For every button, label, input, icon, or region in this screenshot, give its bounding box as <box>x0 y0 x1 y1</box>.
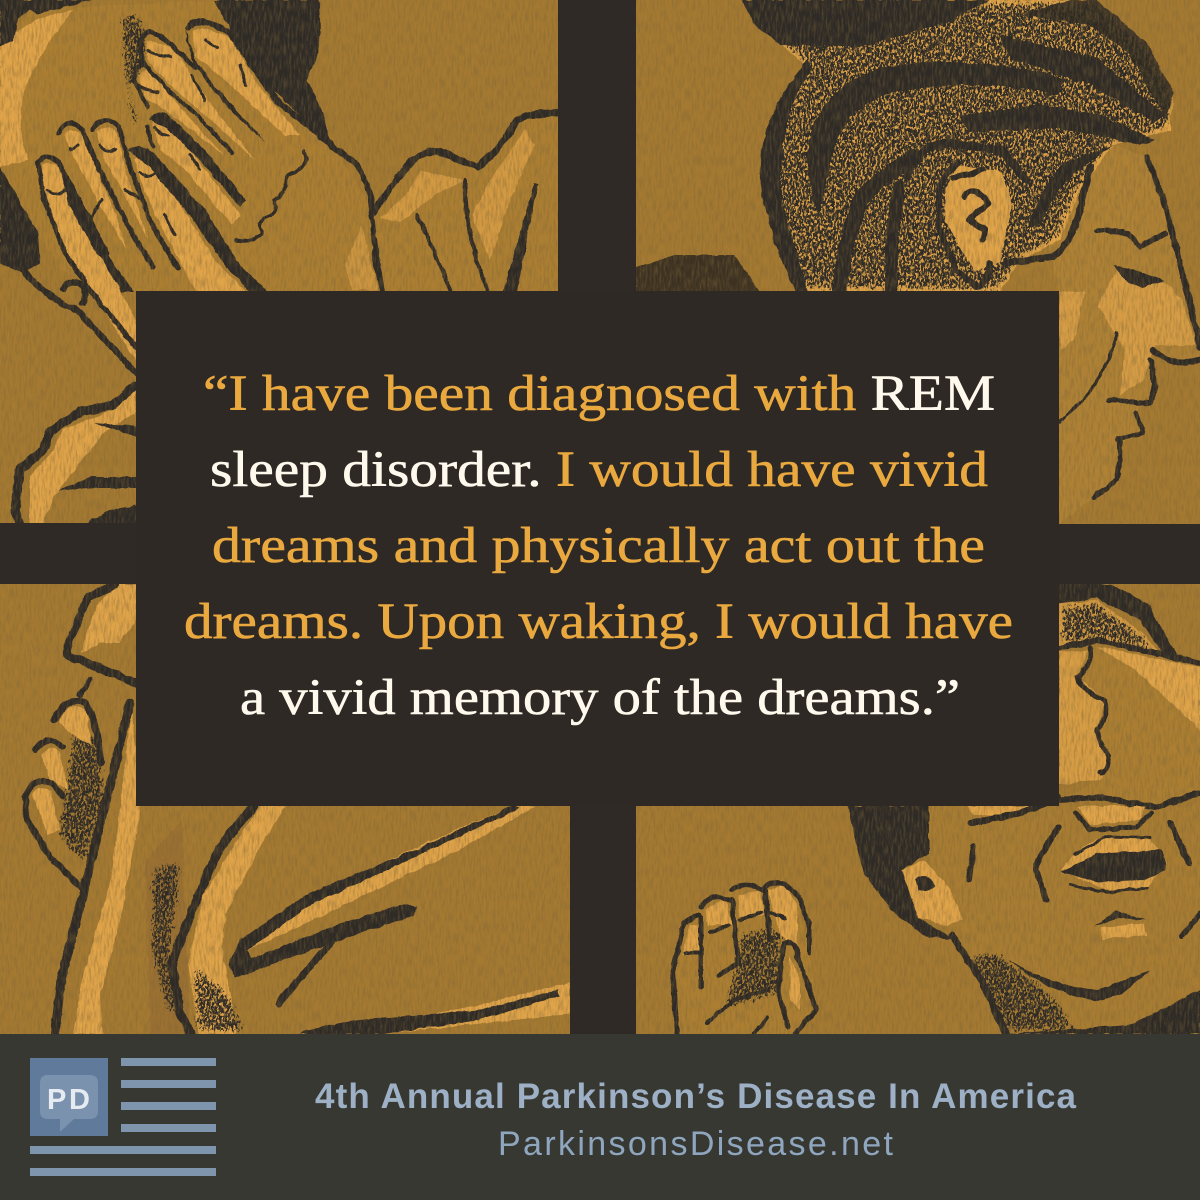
quote line 5: a vivid memory of the dreams.” <box>240 670 960 726</box>
sleeve <box>67 585 136 683</box>
quote line 3: dreams and physically act out the <box>212 518 985 574</box>
lower lip shadow <box>1094 911 1147 927</box>
illustration: top-right profile face with hair <box>636 0 1200 524</box>
eyebrow <box>1097 230 1166 247</box>
ear <box>945 165 1012 272</box>
finger highlights <box>192 28 300 135</box>
arm at left <box>15 385 137 524</box>
shirt outline <box>373 113 559 213</box>
dark shoulder <box>636 255 760 292</box>
upper hand fingers <box>134 22 383 290</box>
dark hair blob <box>214 0 330 142</box>
shirt shoulder <box>373 113 559 292</box>
bottom dark <box>1005 990 1200 1034</box>
blindfold top line <box>1059 640 1200 663</box>
jaw line <box>1059 333 1117 422</box>
temple chalk shading <box>118 12 150 130</box>
flag stripes <box>30 1058 216 1176</box>
finger outlines <box>38 156 107 253</box>
hair and ear <box>847 806 956 940</box>
logo: PD flag <box>30 1058 216 1176</box>
chin smile <box>1009 960 1151 1001</box>
shirt highlights <box>380 130 535 260</box>
right limb with light strip <box>145 806 285 1034</box>
wavy palm edge <box>235 152 307 241</box>
window frame vertical bar bottom <box>570 806 636 1034</box>
hair band <box>1059 584 1178 657</box>
window frame horizontal bar right <box>1059 524 1200 584</box>
sideburn <box>1027 145 1113 228</box>
quote line 4: dreams. Upon waking, I would have <box>184 594 1013 650</box>
light fold <box>1097 647 1200 730</box>
hair chalk texture <box>742 0 1174 292</box>
window frame horizontal bar left <box>0 523 136 584</box>
hand bottom line <box>1059 793 1200 807</box>
mouth <box>1061 837 1166 892</box>
lips and chin <box>1094 360 1155 497</box>
quote panel <box>136 291 1059 806</box>
nail marks <box>138 40 246 170</box>
small thumb and jaw line <box>25 273 136 373</box>
shirt folds <box>417 180 488 292</box>
hair top-left <box>0 0 92 47</box>
hair strokes <box>742 0 1174 292</box>
finger outlines <box>188 22 383 290</box>
nose <box>1078 806 1145 825</box>
quote line 2: sleep disorder. I would have vivid <box>210 442 988 498</box>
profile forehead and nose <box>1147 157 1200 362</box>
illustration: bottom-right face with covered eyes and hand <box>673 584 1200 1034</box>
quote text <box>184 366 1013 726</box>
foot <box>25 680 108 888</box>
face <box>1040 145 1200 524</box>
vertical limb <box>55 703 140 1034</box>
hair mottled fill <box>742 0 1174 292</box>
hair behind lower hand <box>0 167 40 273</box>
mottled head patch <box>1059 600 1163 657</box>
finger highlights <box>42 162 136 360</box>
logo PD letters: PD <box>47 1084 90 1116</box>
head highlight <box>0 10 73 167</box>
ear outline <box>939 163 990 287</box>
eye <box>1113 265 1165 288</box>
quote line 1: “I have been diagnosed with REM <box>203 366 995 422</box>
head <box>0 0 378 292</box>
illustration: top-left figure with hands over face <box>0 0 559 524</box>
wavy hand edge <box>1078 647 1109 773</box>
window frame vertical bar top <box>558 0 636 292</box>
head outline <box>952 935 1006 1034</box>
cheek arcs <box>969 823 1189 900</box>
footer website: ParkinsonsDisease.net <box>498 1125 894 1163</box>
face <box>929 806 1200 1034</box>
hand light area <box>1059 650 1109 785</box>
illustration: bottom-left figure with foot and limb <box>25 585 570 1034</box>
lower hand fingers <box>38 120 268 360</box>
hand medium area <box>1059 645 1200 807</box>
footer title: 4th Annual Parkinson’s Disease In America <box>315 1077 1077 1116</box>
footer bar <box>0 1034 1200 1200</box>
hand <box>673 883 816 1034</box>
face highlights <box>1059 268 1196 395</box>
brush strokes <box>228 806 570 1034</box>
logo speech bubble <box>40 1075 98 1132</box>
